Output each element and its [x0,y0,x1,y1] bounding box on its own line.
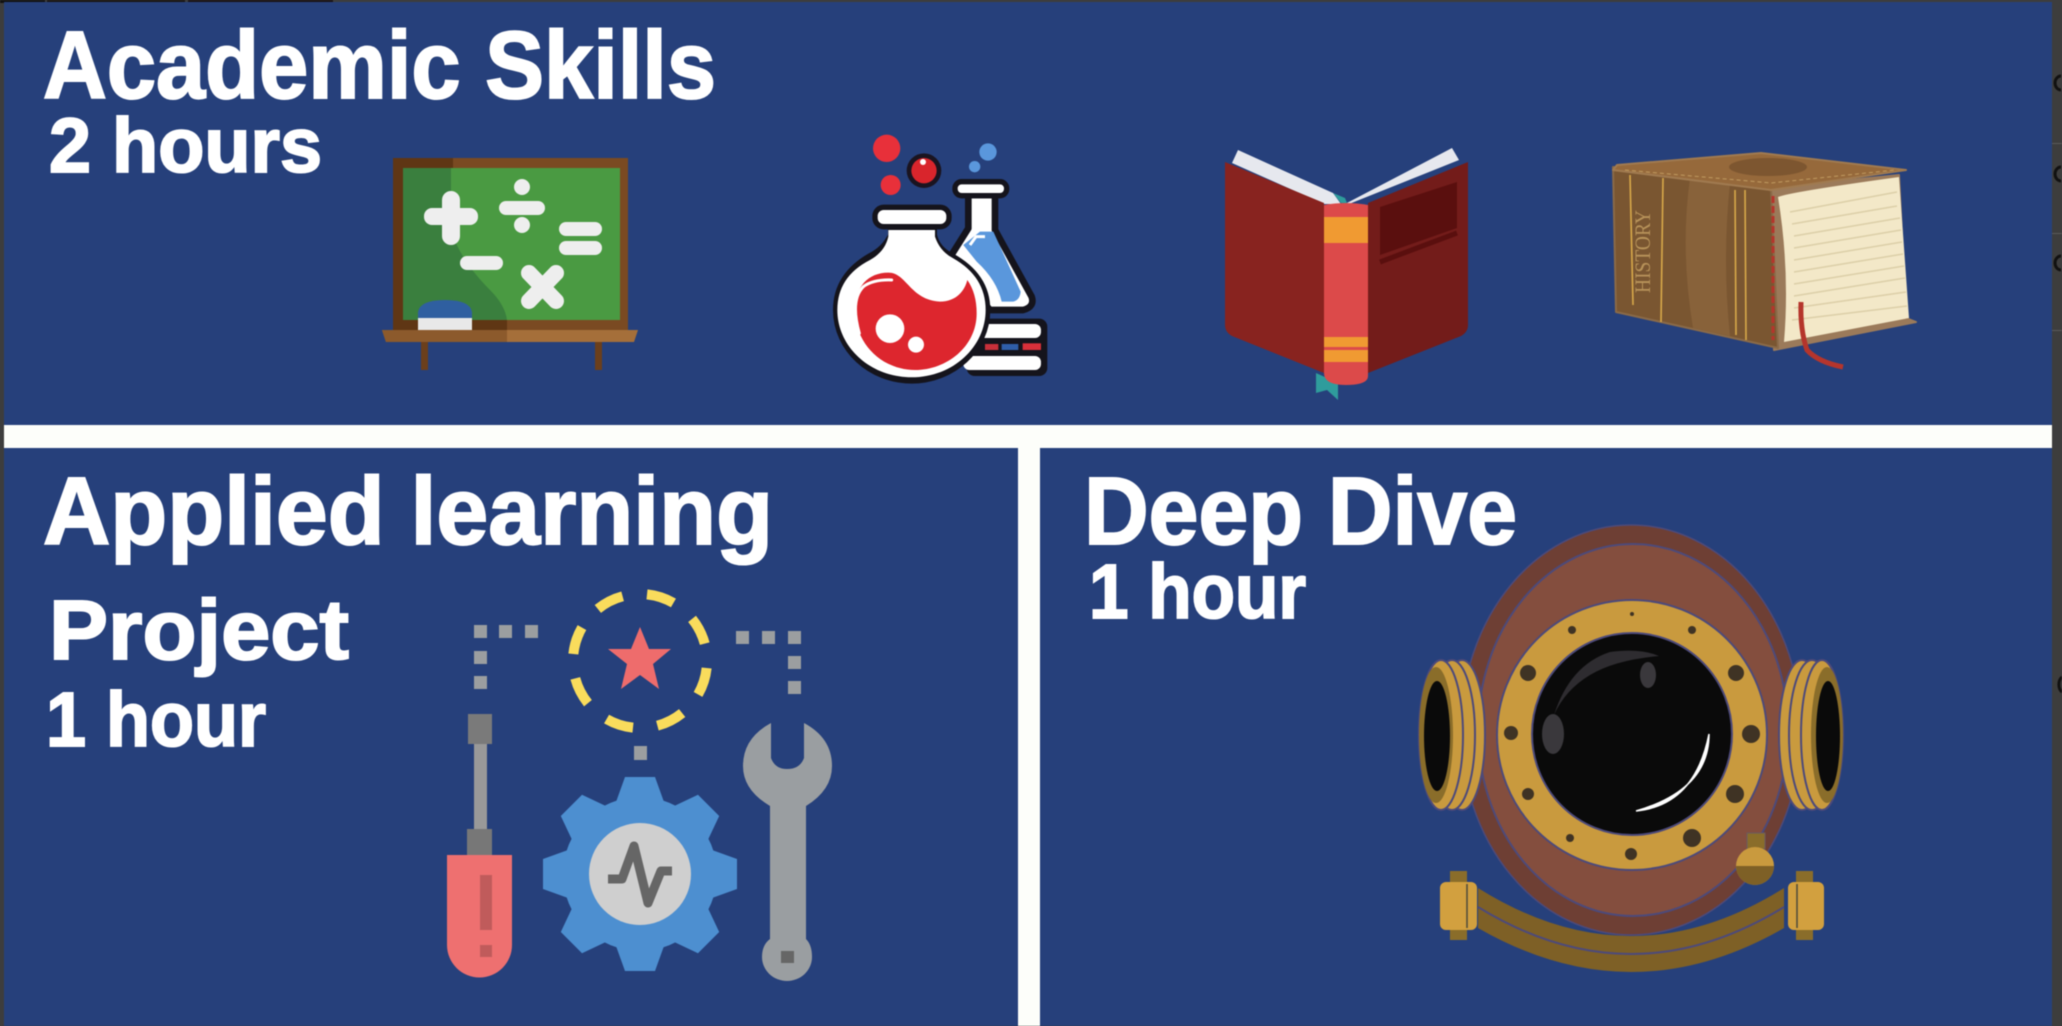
valve [1736,833,1774,885]
icon: diving helmet [1419,525,1843,972]
icon: screwdriver [447,714,512,978]
icon: gear [543,777,737,971]
round flask [835,207,988,382]
glass window [1532,633,1732,835]
icon: dashed circle with star [566,587,714,735]
panel: Academic Skills [4,2,2052,425]
porthole ring [1497,600,1767,870]
heading: Project: Project [49,583,349,677]
heading: Academic Skills: Academic Skills [43,12,716,119]
stack of bars [963,319,1047,376]
heading: Deep Dive: Deep Dive [1084,458,1517,565]
bubbles [873,135,997,195]
book title: HISTORY [1630,210,1655,293]
panel: Deep Dive [1040,448,2052,1026]
dome [1461,525,1801,935]
icon: wrench [743,723,832,981]
panel: Applied learning Project [4,448,1018,1026]
text: 1 hour: 1 hour [46,677,266,763]
icon: chalkboard [382,158,638,370]
icon: open red book [1225,148,1468,400]
back flask [948,182,1032,310]
text: 1 hour: 1 hour [1089,549,1306,635]
icon: dotted connectors [474,625,801,760]
icon: history book [1613,153,1916,367]
left clamp [1440,871,1477,940]
collar [1478,888,1784,972]
left port [1419,660,1485,810]
right port [1779,660,1843,810]
text: 2 hours: 2 hours [49,103,322,189]
right clamp [1788,871,1824,940]
heading: Applied learning: Applied learning [43,458,773,565]
icon: chemistry flasks [835,135,1047,382]
